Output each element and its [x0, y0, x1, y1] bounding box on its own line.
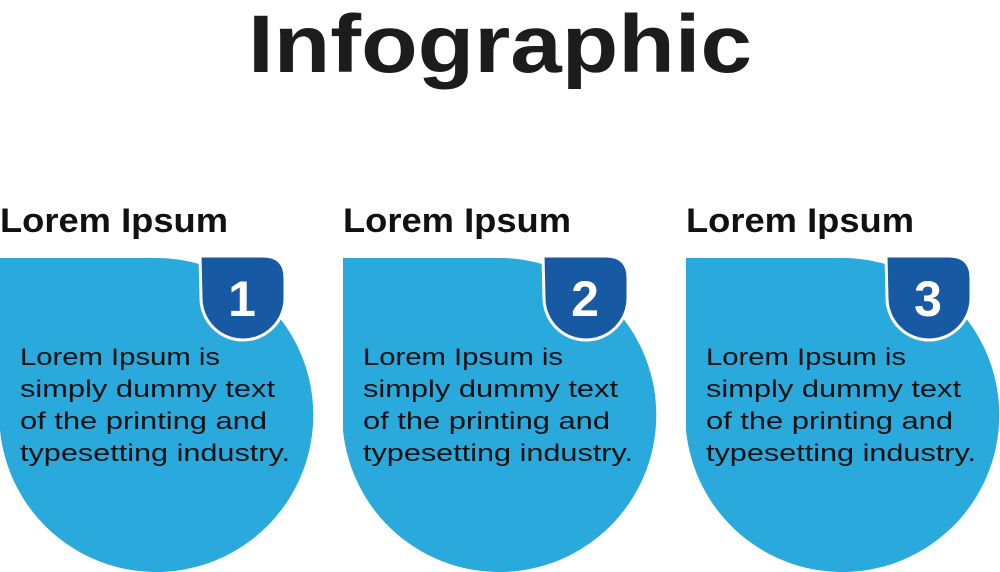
body text 1: of the printing and — [20, 408, 267, 435]
heading 2: Lorem Ipsum — [343, 202, 571, 240]
blue shape 2 — [343, 258, 656, 572]
title: Infographic — [248, 0, 752, 90]
body text 1: Lorem Ipsum is — [20, 344, 220, 371]
body text 2: typesetting industry. — [363, 440, 633, 467]
badge 3 — [886, 256, 971, 340]
body text 3: Lorem Ipsum is — [706, 344, 906, 371]
badge 2: 2 — [571, 271, 599, 327]
body text 3: simply dummy text — [706, 376, 961, 403]
body text 3: typesetting industry. — [706, 440, 976, 467]
body text 3: of the printing and — [706, 408, 953, 435]
badge 1: 1 — [228, 271, 256, 327]
panel: step 2 — [343, 202, 656, 572]
blue shape 3 — [686, 258, 999, 572]
body text 2: simply dummy text — [363, 376, 618, 403]
body text 2: of the printing and — [363, 408, 610, 435]
badge 2 — [543, 256, 628, 340]
body text 2: Lorem Ipsum is — [363, 344, 563, 371]
badge 1 — [200, 256, 285, 340]
heading 1: Lorem Ipsum — [0, 202, 228, 240]
blue shape 1 — [0, 258, 313, 572]
panel: step 3 — [686, 202, 999, 572]
badge 3: 3 — [914, 271, 942, 327]
body text 1: simply dummy text — [20, 376, 275, 403]
heading 3: Lorem Ipsum — [686, 202, 914, 240]
body text 1: typesetting industry. — [20, 440, 290, 467]
panel: step 1 — [0, 202, 313, 572]
